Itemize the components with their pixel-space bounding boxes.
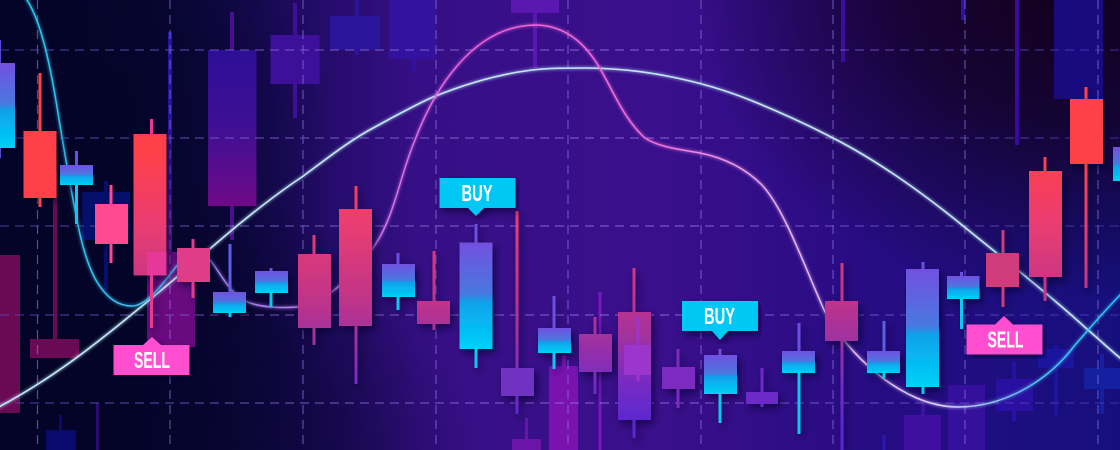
faded wick [168, 32, 172, 282]
faded candle: bottom right [948, 385, 985, 450]
candle: blue small [867, 321, 900, 378]
faded candle [46, 415, 76, 450]
faded wick [598, 292, 602, 450]
signal tag: BUY right: BUY [704, 303, 735, 329]
faded candle: left edge [0, 255, 20, 413]
faded candle [330, 0, 380, 55]
faded candle [549, 355, 578, 450]
signal tag: SELL right [966, 316, 1042, 354]
candle: blue large [906, 262, 939, 394]
faded wick [96, 403, 99, 450]
faded candle: bottom right [1084, 354, 1120, 414]
faded candle [389, 0, 436, 71]
faded wick: top right [1015, 0, 1019, 145]
candle: pink [95, 185, 128, 263]
candle: blue [947, 272, 980, 329]
signal tag: BUY left: BUY [462, 180, 492, 206]
candle: blue [704, 349, 737, 423]
candle: magenta long wick [825, 263, 858, 450]
candle: red [24, 73, 56, 207]
candle: blue [382, 253, 415, 310]
signal tag: SELL right: SELL [988, 326, 1024, 352]
candle: blue large [460, 224, 492, 368]
faded candle: navy [82, 181, 130, 290]
faded candle [512, 418, 541, 450]
candle: long red wick [501, 211, 534, 414]
candle: magenta purple [579, 317, 612, 394]
candle: blue small [213, 244, 246, 317]
candle: magenta [986, 230, 1019, 307]
faded candle [511, 0, 559, 68]
faded candle: top right [1054, 0, 1103, 99]
candle: small purple [746, 368, 778, 407]
signal tag: BUY right [682, 301, 758, 340]
candle: magenta [417, 251, 450, 330]
signal tag: SELL left [114, 337, 190, 375]
candle: red tall [134, 119, 166, 328]
candle: left edge blue [0, 40, 15, 158]
candle: red [1029, 157, 1062, 301]
faded candle [270, 3, 320, 118]
candle: purple [662, 349, 695, 408]
candle: blue long wick [782, 323, 815, 434]
candle: tall magenta [618, 268, 651, 438]
candle: pink [177, 239, 210, 298]
faded candle: behind sell [147, 252, 195, 347]
faded candle: bottom right [1038, 345, 1074, 415]
signal tag: BUY left [440, 178, 516, 216]
candle: overlay purple [624, 317, 651, 381]
signal tag: SELL left: SELL [134, 347, 170, 373]
candle: blue right edge [1113, 147, 1120, 181]
candle: red top right [1070, 87, 1103, 288]
moving average line: long [0, 68, 1120, 409]
candle: magenta tall [339, 186, 372, 384]
candle: blue small [255, 268, 288, 307]
faded wick [882, 435, 886, 450]
candle: blue [538, 296, 571, 369]
faded candle: bottom right [996, 362, 1033, 421]
faded wick: top right [841, 0, 845, 62]
faded candle: large [208, 12, 256, 240]
faded wick: top right [961, 0, 965, 20]
candle: blue [60, 151, 93, 224]
faded candle: long upper wick [30, 172, 79, 358]
faded candle: bottom right [904, 403, 941, 450]
candle: magenta [298, 235, 331, 345]
